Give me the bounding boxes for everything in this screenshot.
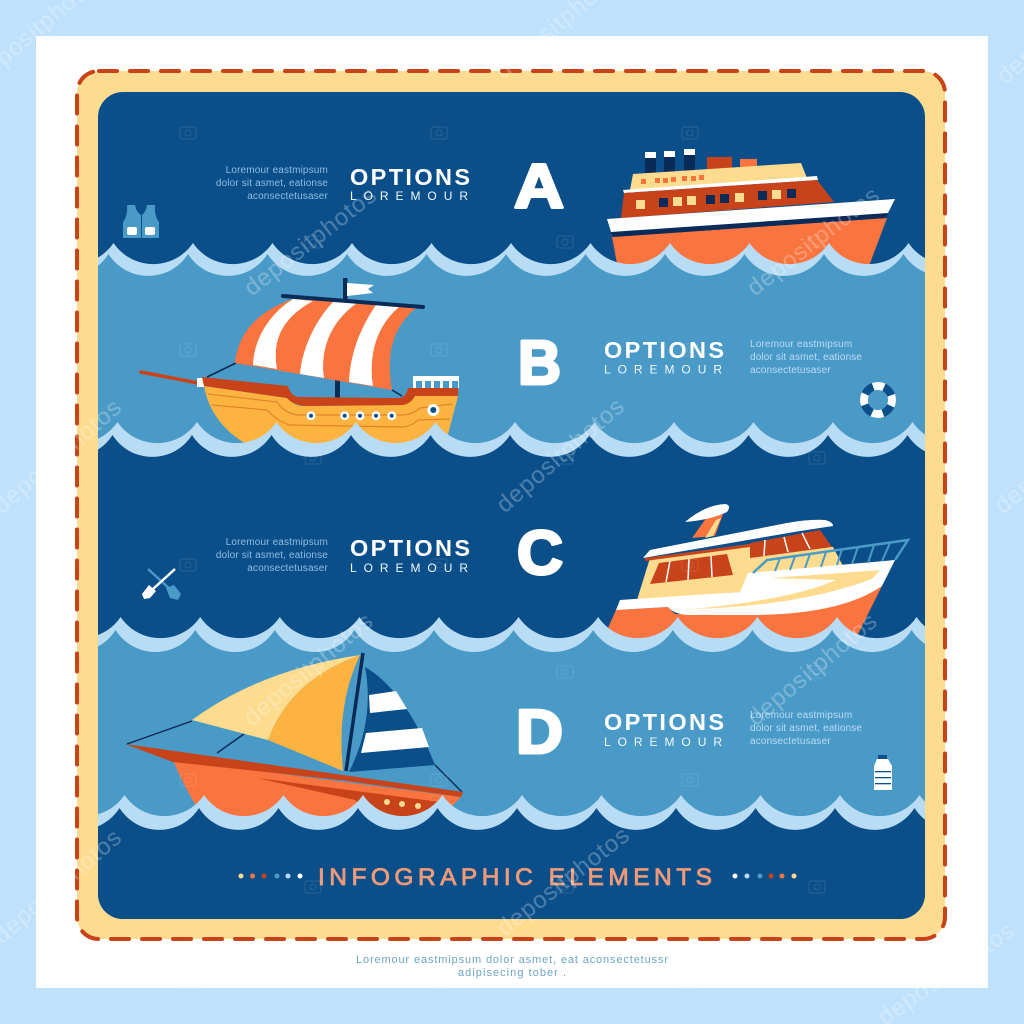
ship B: galleon	[141, 278, 459, 450]
text block: option D: aconsectetusaser	[750, 736, 831, 747]
text block: option C	[216, 535, 470, 575]
footer caption	[356, 954, 668, 979]
text block: option B: dolor sit asmet, eationse	[750, 352, 862, 363]
cream frame	[77, 71, 945, 939]
wave B	[98, 422, 925, 470]
text block: option D: dolor sit asmet, eationse	[750, 723, 862, 734]
ship A: cruise liner	[607, 149, 895, 264]
text block: option B: OPTIONS	[604, 337, 724, 363]
text block: option C: aconsectetusaser	[247, 563, 329, 574]
footer caption: Loremour eastmipsum dolor asmet, eat aconsectetussr	[356, 954, 668, 966]
text block: option B	[604, 337, 862, 376]
title: INFOGRAPHIC ELEMENTS	[318, 864, 712, 891]
text block: option C: dolor sit asmet, eationse	[216, 550, 328, 561]
text block: option D: Loremour eastmipsum	[750, 710, 852, 721]
panel: ocean scene	[98, 92, 925, 919]
panel background	[98, 92, 925, 919]
text block: option B: LOREMOUR	[604, 362, 722, 376]
text block: option A: LOREMOUR	[350, 189, 468, 203]
icon: water bottle	[874, 755, 892, 790]
text block: option B: aconsectetusaser	[750, 365, 831, 376]
icon: life ring	[864, 386, 892, 414]
text block: option D: LOREMOUR	[604, 735, 722, 749]
text block: option C: LOREMOUR	[350, 561, 468, 575]
text block: option A: dolor sit asmet, eationse	[216, 178, 328, 189]
dashed stitched border	[77, 71, 945, 939]
watermarks: depositphotos	[492, 822, 635, 942]
letter D: D	[516, 698, 563, 767]
wave C	[98, 617, 925, 816]
watermarks: depositphotos	[742, 182, 885, 302]
watermarks: depositphotos	[239, 182, 382, 302]
text block: option A: OPTIONS	[350, 164, 470, 190]
letter B: B	[518, 329, 561, 398]
ship D: sailboat	[125, 653, 463, 820]
text block: option C: OPTIONS	[350, 535, 470, 561]
icon: life vest	[123, 205, 159, 238]
letter C: C	[517, 519, 563, 588]
text block: option A: Loremour eastmipsum	[226, 165, 328, 176]
title dots: left	[238, 874, 302, 878]
letter A: A	[514, 152, 564, 222]
text block: option A	[216, 164, 470, 203]
text block: option A: aconsectetusaser	[247, 191, 329, 202]
watermarks: depositphotos	[743, 608, 882, 732]
text block: option D: OPTIONS	[604, 709, 724, 735]
ship C: motor yacht	[608, 504, 908, 640]
text block: option D	[604, 709, 862, 749]
wave D	[98, 795, 925, 919]
text block: option C: Loremour eastmipsum	[226, 537, 328, 548]
watermarks: depositphotos	[491, 393, 630, 519]
text block: option B: Loremour eastmipsum	[750, 339, 852, 350]
wave A	[98, 243, 925, 444]
icon: crossed oars	[142, 569, 181, 600]
watermarks: depositphotos	[239, 608, 378, 732]
footer caption: adipisecing tober .	[458, 967, 566, 979]
title dots: right	[732, 874, 796, 878]
